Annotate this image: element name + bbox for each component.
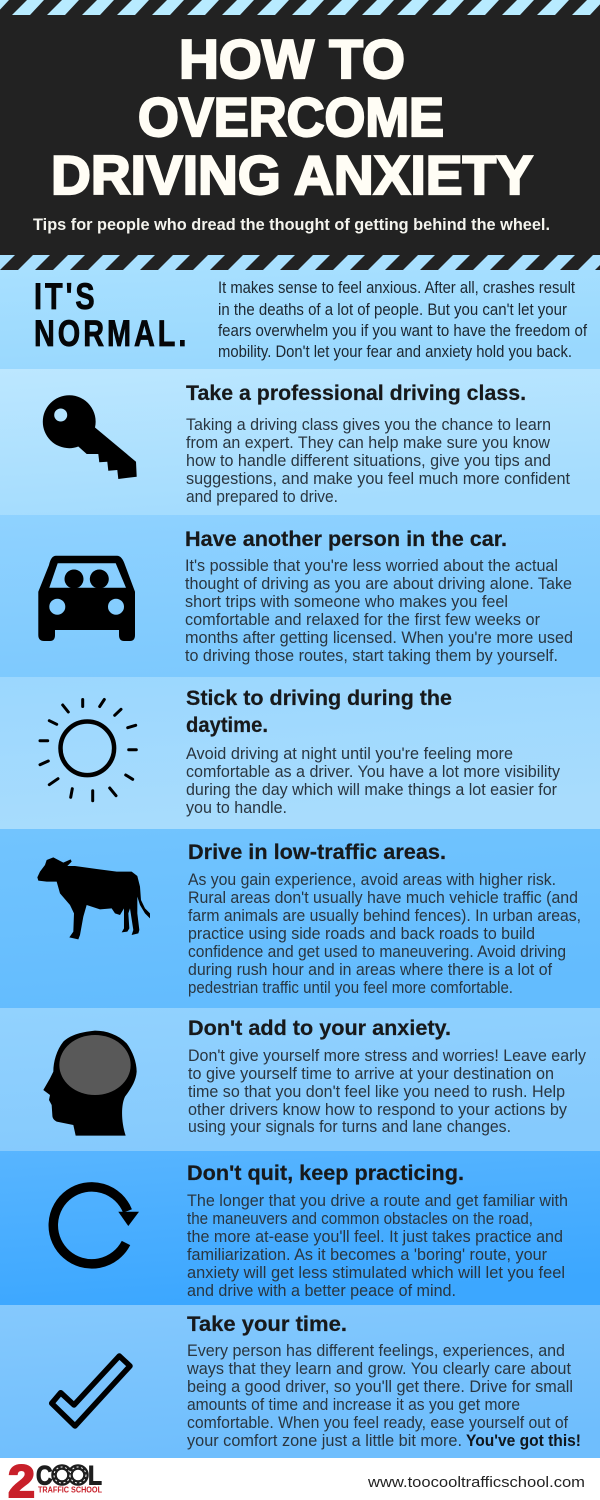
body text: to driving those routes, start taking them by yourself. <box>185 647 558 665</box>
body text <box>186 1342 581 1450</box>
body text: and drive with a better peace of mind. <box>187 1282 456 1300</box>
icon: sun <box>40 700 136 801</box>
bottom hazard stripes <box>0 255 600 270</box>
body text <box>185 557 573 665</box>
body text: using your signals for turns and lane changes. <box>188 1118 511 1136</box>
body text: amounts of time and increase it as you get more <box>187 1396 520 1414</box>
body text: comfortable and relaxed for the first few weeks or <box>185 611 540 629</box>
heading: Have another person in the car. <box>185 528 507 551</box>
body text: Every person has different feelings, experiences, and <box>187 1342 565 1360</box>
body text: to give yourself time to arrive at your destination on <box>188 1065 554 1083</box>
body text: thought of driving as you are about driving alone. Take <box>185 575 572 593</box>
heading: Don't quit, keep practicing. <box>187 1162 464 1185</box>
body text: being a good driver, so you'll get there. Drive for small <box>187 1378 573 1396</box>
title: HOW TO <box>179 28 405 90</box>
logo: 2Cool Traffic School: COOL <box>36 1460 102 1490</box>
heading: Take your time. <box>187 1313 347 1336</box>
body text: other drivers know how to respond to your actions by <box>188 1101 568 1119</box>
body text: Don't give yourself more stress and worries! Leave early <box>188 1047 587 1065</box>
body text: You've got this! <box>466 1432 581 1450</box>
body text: farm animals are usually behind fences). In urban areas, <box>188 907 581 925</box>
heading: Stick to driving during the <box>186 687 452 710</box>
body text: It's possible that you're less worried about the actual <box>185 557 558 575</box>
website url: www.toocooltrafficschool.com <box>367 1474 585 1491</box>
panel: professional driving class <box>0 369 600 515</box>
body text: short trips with someone who makes you feel <box>185 593 508 611</box>
body text: you to handle. <box>186 799 287 817</box>
heading: Drive in low-traffic areas. <box>188 841 446 864</box>
logo: 2Cool Traffic School <box>8 1456 102 1500</box>
heading: it's normal: IT'S <box>34 277 98 318</box>
icon: circular arrow <box>53 1187 139 1264</box>
body text: ways that they learn and grow. You clearly care about <box>186 1360 571 1378</box>
panel: daytime driving <box>0 677 600 829</box>
panel: it's normal <box>0 270 600 369</box>
panel: don't add to your anxiety <box>0 1008 600 1151</box>
body text: pedestrian traffic until you feel more comfortable. <box>188 979 513 997</box>
header panel <box>0 0 600 270</box>
body text: familiarization. As it becomes a 'boring' route, your <box>187 1246 547 1264</box>
panel: low-traffic areas <box>0 829 600 1008</box>
icon: head with brain <box>43 1031 137 1136</box>
body text: the maneuvers and common obstacles on the road, <box>187 1210 533 1228</box>
footer <box>0 1456 600 1500</box>
title: DRIVING ANXIETY <box>51 144 533 206</box>
body text: during rush hour and in areas where there is a lot of <box>188 961 552 979</box>
intro text <box>218 278 587 361</box>
title: OVERCOME <box>138 86 444 148</box>
heading: daytime. <box>186 714 268 737</box>
body text <box>186 745 561 817</box>
body text: and prepared to drive. <box>186 488 338 506</box>
body text: As you gain experience, avoid areas with higher risk. <box>188 871 556 889</box>
heading: Take a professional driving class. <box>186 382 526 405</box>
body text: the more at-ease you'll feel. It just takes practice and <box>187 1228 563 1246</box>
body text: your comfort zone just a little bit more. <box>187 1432 462 1450</box>
subtitle: Tips for people who dread the thought of getting behind the wheel. <box>33 215 550 234</box>
body text: comfortable as a driver. You have a lot more visibility <box>186 763 561 781</box>
heading: Don't add to your anxiety. <box>188 1017 451 1040</box>
body text: Avoid driving at night until you're feeling more <box>186 745 513 763</box>
body text: suggestions, and make you feel much more confident <box>186 470 570 488</box>
body text: Taking a driving class gives you the chance to learn <box>186 416 551 434</box>
body text: anxiety will get less stimulated which will let you feel <box>187 1264 565 1282</box>
body text: time so that you don't feel like you need to rush. Help <box>188 1083 565 1101</box>
top hazard stripes <box>0 0 600 15</box>
body text: confidence and get used to maneuvering. Avoid driving <box>188 943 566 961</box>
body text: comfortable. When you feel ready, ease yourself out of <box>187 1414 568 1432</box>
heading: it's normal: NORMAL. <box>34 314 189 355</box>
panel: another person in the car <box>0 515 600 677</box>
body text: from an expert. They can help make sure you know <box>186 434 550 452</box>
body text <box>188 1047 587 1136</box>
icon: check mark <box>52 1356 130 1426</box>
body text <box>188 871 581 997</box>
panel: keep practicing <box>0 1151 600 1305</box>
icon: cow <box>37 857 150 939</box>
body text: practice using side roads and back roads to build <box>188 925 535 943</box>
title <box>51 28 533 206</box>
body text: months after getting licensed. When you're more used <box>185 629 573 647</box>
icon: car with two people <box>38 556 135 641</box>
icon: key <box>43 395 137 479</box>
body text: how to handle different situations, give you tips and <box>186 452 551 470</box>
body text: during the day which will make things a lot easier for <box>186 781 557 799</box>
heading <box>186 687 452 737</box>
body text: Rural areas don't usually have much vehicle traffic (and <box>188 889 578 907</box>
body text <box>186 416 570 506</box>
body text <box>187 1192 568 1300</box>
panel: take your time <box>0 1305 600 1458</box>
logo: 2Cool Traffic School: TRAFFIC SCHOOL <box>38 1484 102 1494</box>
heading: it's normal <box>34 277 189 355</box>
body text: The longer that you drive a route and get familiar with <box>187 1192 568 1210</box>
